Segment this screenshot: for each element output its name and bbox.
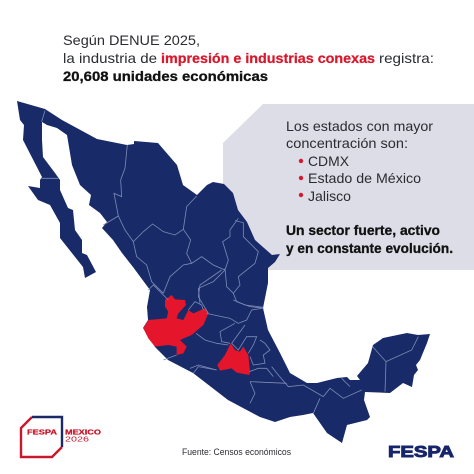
title: Según DENUE 2025, xyxy=(63,32,200,48)
title xyxy=(63,32,434,84)
list of states: CDMX xyxy=(308,153,350,169)
source note: Fuente: Censos económicos xyxy=(182,447,291,457)
logo event name: MEXICO xyxy=(65,430,102,436)
title: la industria de xyxy=(63,50,157,66)
map: Estado de México and CDMX highlighted xyxy=(217,343,250,375)
intro text: concentración son: xyxy=(286,135,408,151)
map: northern state borders xyxy=(42,111,238,303)
intro text xyxy=(286,118,433,151)
logo: FESPA Mexico 2026 xyxy=(21,417,102,457)
map: gulf state borders xyxy=(225,221,263,308)
closing statement xyxy=(286,222,453,256)
map: Yucatán borders xyxy=(373,337,418,392)
map: southern state borders xyxy=(148,270,362,413)
map: central state borders xyxy=(190,300,273,377)
map: Jalisco highlighted xyxy=(143,295,208,355)
title: 20,608 unidades económicas xyxy=(63,68,268,84)
logo: FESPA: FESPA xyxy=(388,444,455,461)
title: impresión e industrias conexas xyxy=(161,50,375,66)
intro text: Los estados con mayor xyxy=(286,118,433,134)
map: country silhouette xyxy=(17,101,430,443)
list of states: Estado de México xyxy=(308,170,421,186)
panel: grey callout background xyxy=(223,104,474,270)
closing statement: Un sector fuerte, activo xyxy=(286,222,440,238)
closing statement: y en constante evolución. xyxy=(286,240,453,256)
list of states: Jalisco xyxy=(308,188,351,204)
logo year: 2026 xyxy=(65,436,89,444)
map of Mexico xyxy=(17,101,430,443)
logo frame xyxy=(21,417,62,457)
logo wordmark: FESPA xyxy=(27,430,57,436)
callout text xyxy=(286,118,453,256)
list of states xyxy=(299,153,421,204)
title: registra: xyxy=(379,50,434,66)
